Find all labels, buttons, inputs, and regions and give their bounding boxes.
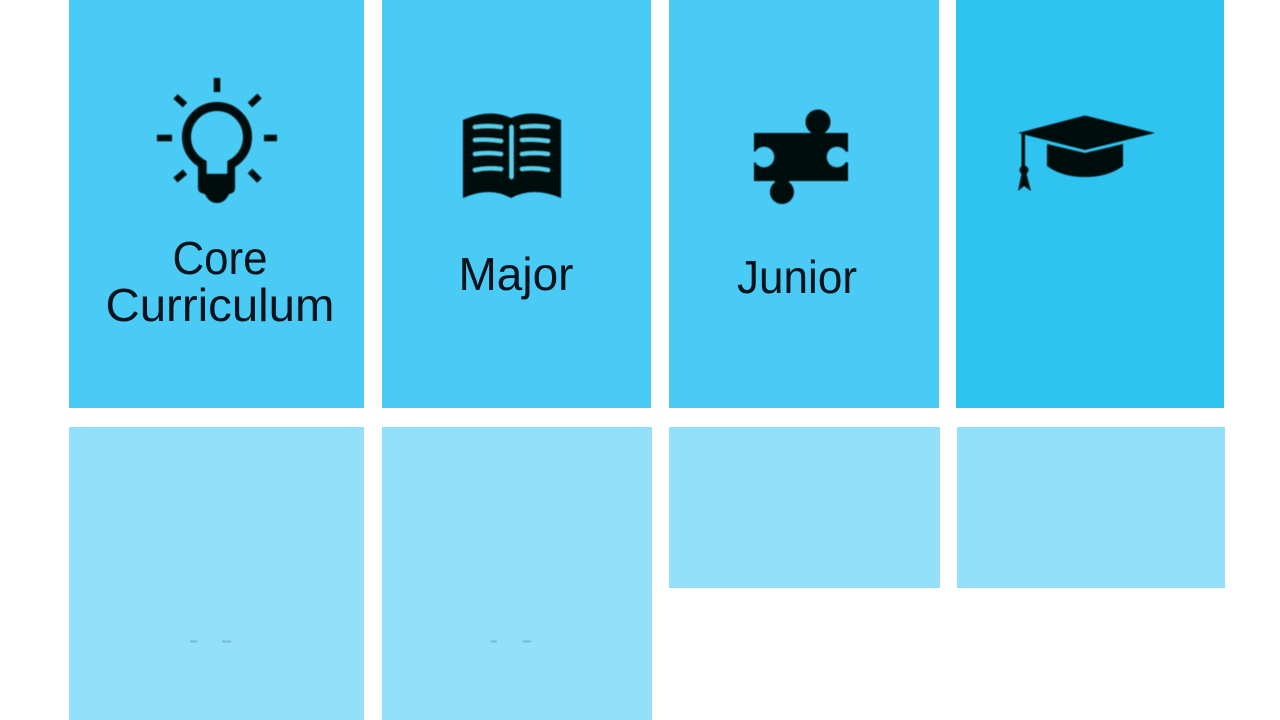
icon: puzzle piece [752,110,849,204]
icon: light bulb [157,78,277,203]
panel: senior [956,0,1224,408]
panel: major [382,0,651,408]
label: Junior: Junior [737,251,857,303]
panel: core curriculum [69,0,364,408]
panel: core curriculum detail [69,427,364,720]
panel: major detail [382,427,652,720]
label: Core Curriculum [106,232,334,331]
icon: open book [463,113,561,198]
icon: graduation cap [1018,116,1155,191]
panel: senior detail [957,427,1225,588]
panel: junior detail [669,427,940,588]
placeholder marks [491,640,531,642]
label: Major: Major [458,248,574,300]
label: Core Curriculum: Core [172,232,268,284]
placeholder marks [190,640,231,642]
label: Core Curriculum: Curriculum [106,279,334,331]
panel: junior [669,0,939,408]
